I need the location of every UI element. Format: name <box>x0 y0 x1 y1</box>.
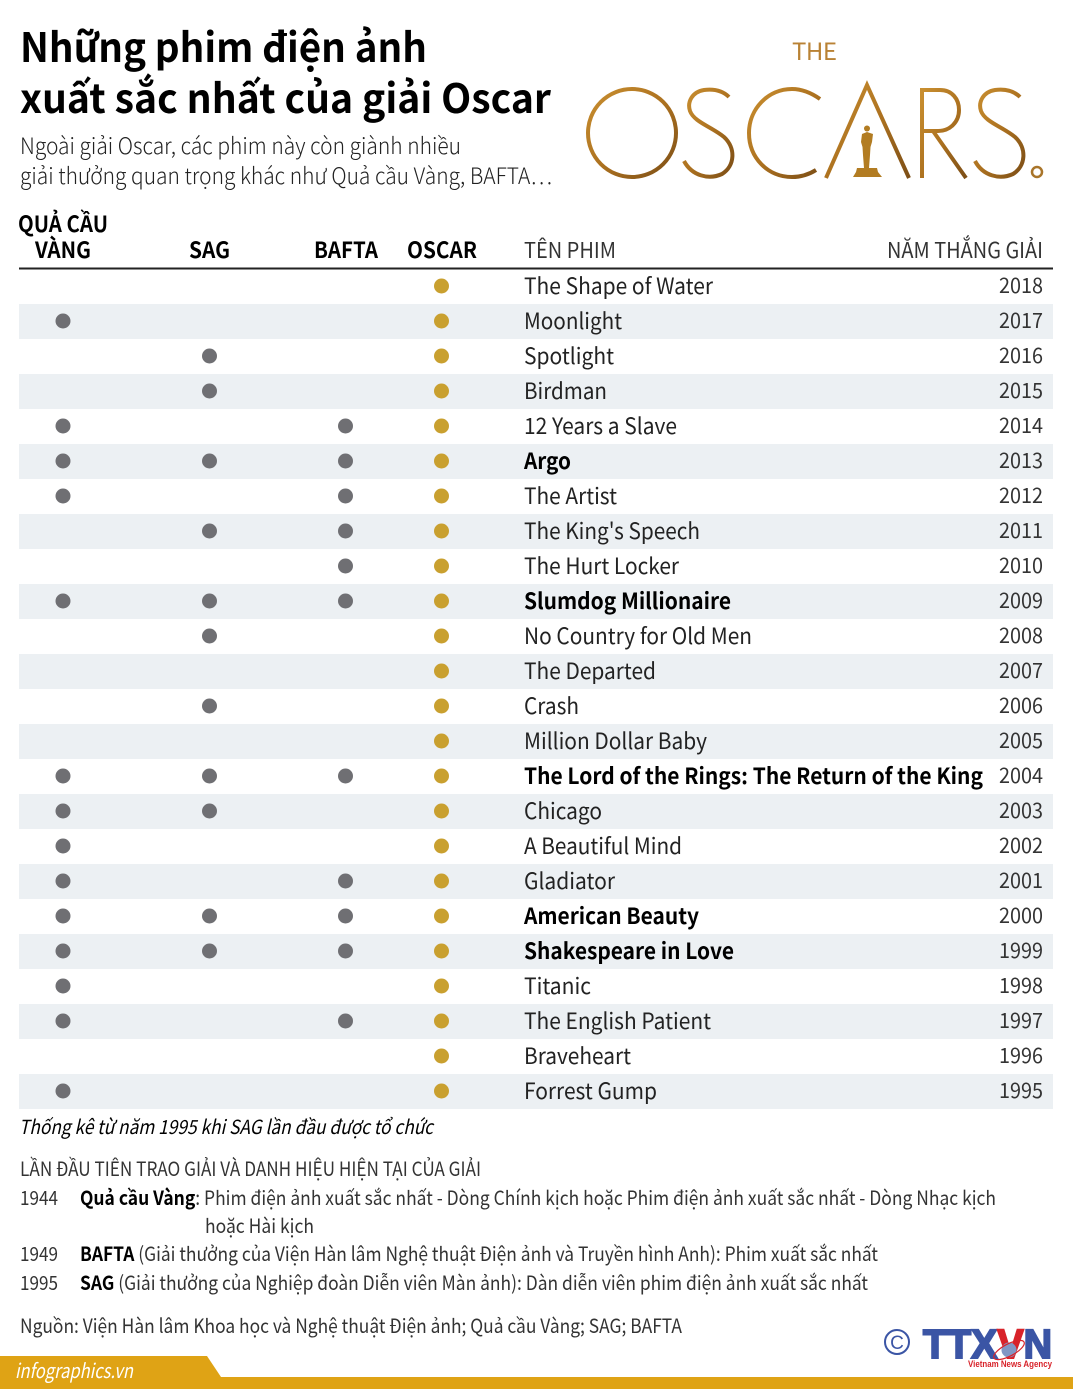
row: Million Dollar Baby: 2005 <box>999 725 1043 755</box>
subtitle: Ngoài giải Oscar, các phim này còn giành nhiều <box>20 129 461 161</box>
row: 12 Years a Slave <box>56 409 1043 441</box>
row: 12 Years a Slave: 12 Years a Slave <box>524 409 677 441</box>
row: Crash: Crash <box>524 689 579 721</box>
row: American Beauty: 2000 <box>999 900 1043 930</box>
row: The Shape of Water: The Shape of Water <box>524 269 713 301</box>
row: A Beautiful Mind <box>56 829 1043 861</box>
table header <box>18 207 1053 270</box>
logo: The Oscars: THE <box>792 32 837 67</box>
awards section <box>20 1153 996 1296</box>
row: The Lord of the Rings: The Lord of the Rings: The Return of the King <box>524 759 984 791</box>
row: Million Dollar Baby <box>19 724 1053 759</box>
row: Forrest Gump <box>19 1074 1053 1109</box>
row: Birdman: 2015 <box>999 375 1043 405</box>
table header: VÀNG <box>34 233 91 265</box>
row: The Hurt Locker <box>338 549 1043 581</box>
row: No Country for Old Men: No Country for Old Men <box>524 619 752 651</box>
row: Crash <box>202 689 1043 721</box>
row: Braveheart <box>434 1039 1043 1071</box>
row: Slumdog Millionaire: Slumdog Millionaire <box>524 584 731 616</box>
footer band: infographics.vn <box>15 1355 134 1384</box>
row: The Departed: 2007 <box>999 655 1043 685</box>
table header: QUẢ CẦU <box>18 207 108 239</box>
row: The Hurt Locker: 2010 <box>999 550 1043 580</box>
subtitle: giải thưởng quan trọng khác như Quả cầu Vàng, BAFTA… <box>20 159 552 191</box>
logo: TTXVN: Vietnam News Agency <box>968 1359 1052 1369</box>
row: Spotlight <box>202 339 1043 371</box>
row: Forrest Gump: Forrest Gump <box>524 1074 657 1106</box>
row: Argo <box>19 444 1053 479</box>
row: Shakespeare in Love: Shakespeare in Love <box>524 934 734 966</box>
source: Nguồn: Viện Hàn lâm Khoa học và Nghệ thuật Điện ảnh; Quả cầu Vàng; SAG; BAFTA <box>20 1310 682 1339</box>
row: Slumdog Millionaire <box>19 584 1053 619</box>
row: The English Patient: 1997 <box>999 1005 1043 1035</box>
row: Slumdog Millionaire: 2009 <box>999 585 1043 615</box>
row: Braveheart: 1996 <box>999 1040 1043 1070</box>
logo: The Oscars <box>588 32 1042 178</box>
awards section: Quả cầu Vàng: Phim điện ảnh xuất sắc nhất - Dòng Chính kịch hoặc Phim điện ảnh xuất sắc nhất - Dòng Nhạc kịch <box>80 1182 996 1211</box>
row: Moonlight: 2017 <box>999 305 1043 335</box>
awards section: 1944 <box>20 1182 58 1211</box>
row: The Shape of Water <box>434 269 1043 301</box>
row: 12 Years a Slave: 2014 <box>999 410 1043 440</box>
row: A Beautiful Mind: A Beautiful Mind <box>524 829 682 861</box>
row: A Beautiful Mind: 2002 <box>999 830 1043 860</box>
table header: OSCAR <box>407 233 477 265</box>
row: The Artist: The Artist <box>524 479 617 511</box>
row: Million Dollar Baby: Million Dollar Baby <box>524 724 707 756</box>
row: Birdman: Birdman <box>524 374 607 406</box>
subtitle <box>20 129 552 191</box>
row: Argo: Argo <box>523 444 571 476</box>
row: Argo: 2013 <box>999 445 1043 475</box>
row: The Departed <box>19 654 1053 689</box>
row: Moonlight: Moonlight <box>524 304 622 336</box>
row: The Lord of the Rings: 2004 <box>999 760 1043 790</box>
row: Gladiator <box>19 864 1053 899</box>
row: The Artist: 2012 <box>999 480 1043 510</box>
icon: copyright <box>885 1330 909 1354</box>
row: Birdman <box>19 374 1053 409</box>
logo: TTXVN: TTXVN <box>923 1321 1052 1367</box>
awards section: SAG (Giải thưởng của Nghiệp đoàn Diễn viên Màn ảnh): Dàn diễn viên phim điện ảnh xuất sắc nhất <box>80 1267 869 1296</box>
row: The King's Speech: The King's Speech <box>524 514 700 546</box>
row: The Lord of the Rings <box>56 759 1043 791</box>
icon: copyright: C <box>890 1333 904 1354</box>
row: American Beauty <box>56 899 1043 931</box>
awards section: BAFTA (Giải thưởng của Viện Hàn lâm Nghệ thuật Điện ảnh và Truyền hình Anh): Phim xuất sắc nhất <box>80 1238 879 1267</box>
awards section: 1949 <box>20 1238 58 1267</box>
footer band <box>0 1355 1073 1389</box>
row: The English Patient <box>19 1004 1053 1039</box>
row: Titanic: 1998 <box>999 970 1043 1000</box>
row: Braveheart: Braveheart <box>524 1039 631 1071</box>
row: The Artist <box>56 479 1043 511</box>
row: Shakespeare in Love <box>19 934 1053 969</box>
row: The King's Speech <box>19 514 1053 549</box>
row: Shakespeare in Love: 1999 <box>999 935 1043 965</box>
row: No Country for Old Men <box>202 619 1043 651</box>
awards section: LẦN ĐẦU TIÊN TRAO GIẢI VÀ DANH HIỆU HIỆN TẠI CỦA GIẢI <box>20 1153 481 1182</box>
icon: statuette <box>853 126 882 177</box>
row: The Hurt Locker: The Hurt Locker <box>524 549 679 581</box>
note: Thống kê từ năm 1995 khi SAG lần đầu được tổ chức <box>19 1111 435 1140</box>
row: Gladiator: 2001 <box>999 865 1043 895</box>
title: Những phim điện ảnh <box>20 15 427 74</box>
table header: SAG <box>189 233 230 265</box>
row: The English Patient: The English Patient <box>524 1004 711 1036</box>
awards section: 1995 <box>20 1267 58 1296</box>
row: Crash: 2006 <box>999 690 1043 720</box>
awards section: hoặc Hài kịch <box>205 1210 314 1239</box>
row: Spotlight: Spotlight <box>524 339 614 371</box>
row: The Shape of Water: 2018 <box>999 270 1043 300</box>
table header: NĂM THẮNG GIẢI <box>887 234 1043 265</box>
row: Chicago: Chicago <box>524 794 602 826</box>
row: American Beauty: American Beauty <box>523 899 699 931</box>
table header: TÊN PHIM <box>524 234 616 265</box>
row: Moonlight <box>19 304 1053 339</box>
row: No Country for Old Men: 2008 <box>999 620 1043 650</box>
title <box>20 15 551 125</box>
row: The King's Speech: 2011 <box>999 515 1043 545</box>
row: Chicago <box>19 794 1053 829</box>
table header: BAFTA <box>314 233 379 265</box>
row: Titanic <box>56 969 1043 1001</box>
row: Titanic: Titanic <box>524 969 591 1001</box>
row: Spotlight: 2016 <box>999 340 1043 370</box>
row: The Departed: The Departed <box>524 654 656 686</box>
row: Forrest Gump: 1995 <box>999 1075 1043 1105</box>
row: Gladiator: Gladiator <box>524 864 615 896</box>
row: Chicago: 2003 <box>999 795 1043 825</box>
title: xuất sắc nhất của giải Oscar <box>20 66 551 125</box>
